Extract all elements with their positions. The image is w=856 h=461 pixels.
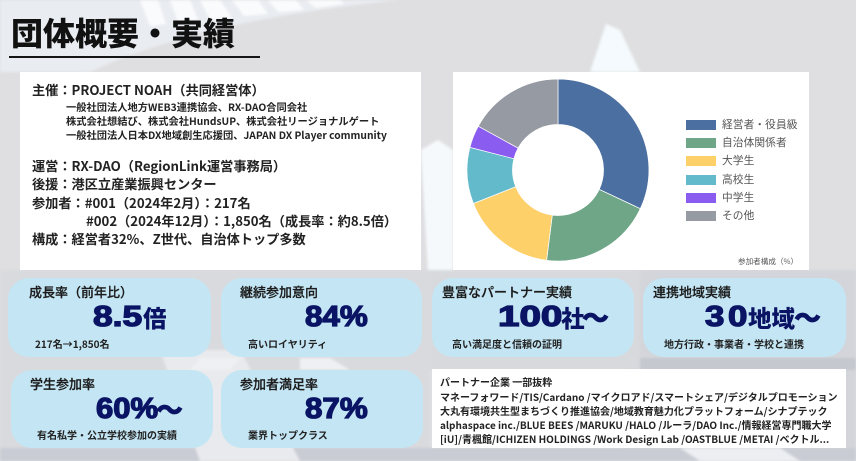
card note: 高い満足度と信頼の証明 [452, 336, 562, 351]
card figure [704, 297, 821, 336]
card note: 高いロイヤリティ [248, 336, 327, 351]
legend: university students [686, 156, 716, 166]
partner list line 1: マネーフォワード/TIS/Cardano /マイクロアド/スマートシェア/デジタルプロモーション [440, 389, 838, 404]
card figure: 87% [305, 393, 368, 425]
supporter line: 後援：港区立産業振興センター [32, 174, 217, 193]
panel: organisation overview [20, 72, 421, 270]
card note: 有名私学・公立学校参加の実績 [37, 427, 177, 442]
slice: high school students [467, 147, 516, 204]
organiser members line 2: 株式会社想結び、株式会社HundsUP、株式会社リージョナルゲート [66, 113, 379, 128]
partner list line 4: [iU]/青楓館/ICHIZEN HOLDINGS /Work Design Lab /OASTBLUE /METAI /ベクトル... [440, 431, 829, 446]
participants line 1: 参加者：#001（2024年2月）：217名 [32, 193, 251, 212]
card figure: 〜 [582, 297, 609, 336]
card figure: 〜 [794, 297, 821, 336]
card note: 業界トップクラス [248, 427, 328, 442]
slice: local government [547, 189, 640, 261]
organiser members line 1: 一般社団法人地方WEB3連携協会、RX-DAO合同会社 [66, 99, 307, 114]
legend: executives [686, 120, 716, 130]
card figure [498, 297, 609, 336]
card heading: 参加者満足率 [240, 374, 318, 393]
operator line: 運営：RX-DAO（RegionLink運営事務局） [32, 156, 286, 175]
card: continued participation [221, 278, 422, 357]
card figure [96, 389, 183, 428]
card figure: 60% [96, 393, 158, 425]
legend: others [686, 211, 716, 221]
partner heading: パートナー企業 一部抜粋 [440, 374, 552, 389]
card heading: 学生参加率 [30, 374, 95, 393]
card: partners [432, 278, 634, 357]
card figure: 8.5 [93, 301, 142, 333]
card note: 地方行政・事業者・学校と連携 [664, 336, 804, 351]
legend label: junior high students: 中学生 [722, 190, 754, 205]
organiser line: 主催：PROJECT NOAH（共同経営体） [32, 80, 265, 99]
partner list line 3: alphaspace inc./BLUE BEES /MARUKU /HALO /ルーラ/DAO Inc./情報経営専門職大学 [440, 417, 831, 432]
legend label: high school students: 高校生 [722, 172, 754, 187]
chart caption: 参加者構成（%） [738, 256, 798, 267]
card heading: 成長率（前年比） [29, 282, 133, 301]
slice: executives [558, 79, 649, 209]
legend label: others: その他 [722, 208, 754, 223]
card figure: 〜 [156, 389, 183, 428]
legend label: university students: 大学生 [722, 153, 754, 168]
panel: participant composition chart [453, 72, 809, 270]
title: 団体概要・実績 [11, 9, 235, 55]
card: satisfaction [221, 370, 423, 448]
slice: junior high students [470, 126, 518, 159]
card figure [93, 300, 166, 334]
slice: university students [473, 187, 552, 260]
card figure: 30 [705, 301, 751, 333]
card figure: 84% [305, 301, 368, 333]
composition line: 構成：経営者32%、Z世代、自治体トップ多数 [32, 229, 306, 248]
panel: partner companies [432, 369, 846, 448]
legend label: executives: 経営者・役員級 [722, 117, 798, 132]
card: partner regions [643, 278, 846, 357]
card figure: 100 [498, 301, 562, 333]
card: growth rate [8, 278, 211, 357]
card note: 217名→1,850名 [35, 336, 110, 351]
organiser members line 3: 一般社団法人日本DX地域創生応援団、JAPAN DX Player community [66, 127, 387, 142]
legend: high school students [686, 175, 716, 185]
partner list line 2: 大丸有環境共生型まちづくり推進協会/地域教育魅力化プラットフォーム/シナプテック [440, 403, 827, 418]
slice: others [478, 79, 558, 148]
card figure: 地域 [748, 300, 795, 334]
card heading: 継続参加意向 [240, 282, 318, 301]
legend label: local government: 自治体関係者 [722, 135, 787, 150]
card figure: 倍 [143, 300, 166, 334]
title underline [9, 56, 260, 58]
chart legend [686, 117, 798, 223]
card heading: 連携地域実績 [653, 282, 731, 301]
legend: local government [686, 138, 716, 148]
card figure: 社 [561, 300, 584, 334]
card heading: 豊富なパートナー実績 [442, 282, 572, 301]
legend: junior high students [686, 193, 716, 203]
card: student participation [11, 370, 213, 448]
participants line 2: #002（2024年12月）：1,850名（成長率：約8.5倍） [86, 211, 397, 230]
